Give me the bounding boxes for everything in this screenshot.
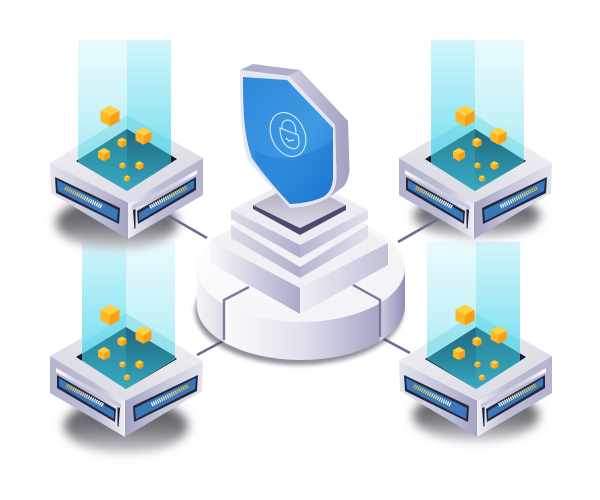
shadow: upper right server [414, 194, 540, 238]
pedestal steps [210, 175, 388, 314]
data cubes [453, 106, 506, 182]
server: lower right [399, 242, 552, 437]
upper step [231, 175, 368, 258]
shield side [289, 70, 350, 198]
shadow: lower right server [413, 391, 539, 441]
circuit line: left [224, 287, 249, 340]
shield face [243, 77, 333, 204]
dark plate [253, 182, 346, 235]
server: upper right [399, 40, 552, 239]
light beam [431, 40, 524, 191]
light beam [427, 242, 520, 389]
data cubes [453, 305, 506, 381]
lower block [210, 195, 388, 314]
security shield [240, 64, 350, 208]
shield lower shade [255, 140, 333, 204]
server: lower left [50, 242, 203, 437]
middle step [231, 190, 368, 278]
light beam [82, 242, 175, 389]
shield top edge [240, 64, 300, 76]
server: upper left [50, 40, 203, 239]
circuit line: right [353, 285, 380, 337]
data cubes [98, 305, 152, 381]
central base disc [195, 214, 405, 365]
connector lines [167, 215, 440, 355]
data cubes [98, 106, 152, 182]
shadow: upper left server [56, 197, 178, 249]
light beam [78, 40, 171, 191]
lock icon [263, 107, 313, 162]
shield rim [240, 70, 336, 208]
shadow: lower left server [64, 399, 188, 453]
